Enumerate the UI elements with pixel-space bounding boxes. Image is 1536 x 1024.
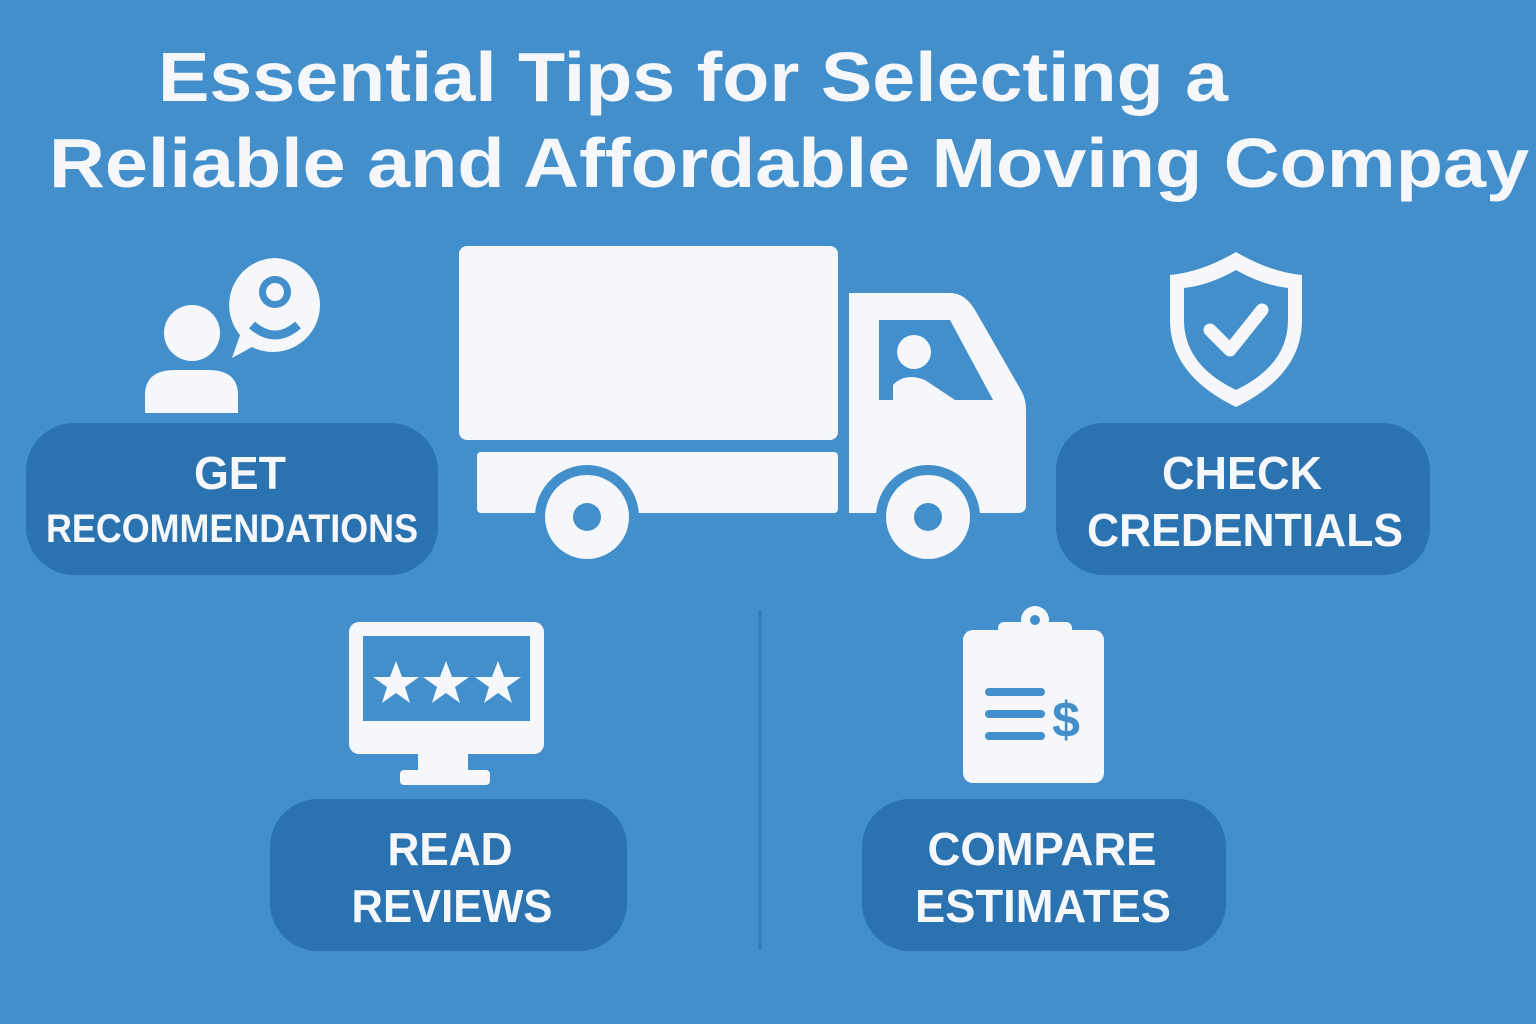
pill: get recommendations: GET — [194, 447, 286, 499]
icon: truck — [459, 246, 1026, 569]
title: Reliable and Affordable Moving Compay — [49, 124, 1529, 202]
pill: read reviews: REVIEWS — [352, 880, 552, 932]
pill: get recommendations — [26, 423, 438, 575]
pill: read reviews — [270, 799, 627, 951]
pill: check credentials: CREDENTIALS — [1087, 504, 1403, 556]
pill: read reviews: READ — [388, 823, 512, 875]
pill: compare estimates: COMPARE — [928, 823, 1156, 875]
divider — [758, 610, 762, 950]
pill: compare estimates: ESTIMATES — [915, 880, 1171, 932]
pill: check credentials — [1056, 423, 1430, 575]
icon: people recommendations — [145, 258, 320, 413]
pill: get recommendations: RECOMMENDATIONS — [46, 507, 418, 551]
icon: monitor with stars — [349, 622, 544, 785]
icon: clipboard estimate: $ — [1052, 692, 1080, 748]
pill: check credentials: CHECK — [1162, 447, 1322, 499]
icon: clipboard estimate — [963, 606, 1104, 783]
title — [49, 38, 1529, 202]
pill: compare estimates — [862, 799, 1226, 951]
title: Essential Tips for Selecting a — [158, 38, 1229, 116]
icon: shield — [1170, 252, 1302, 407]
